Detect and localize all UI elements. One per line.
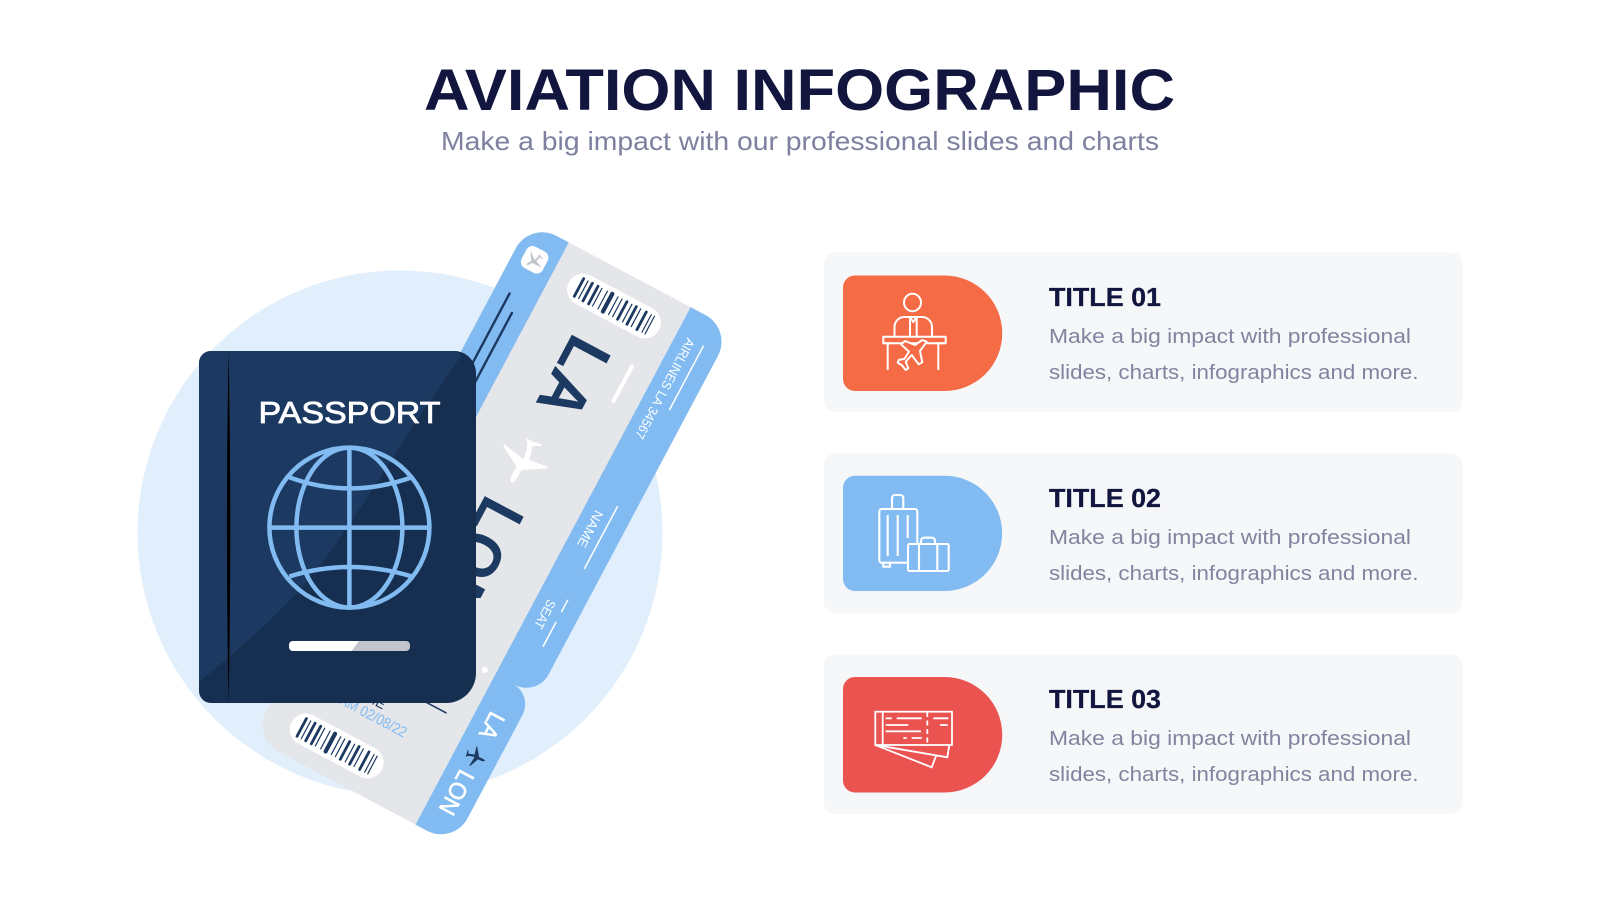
panel: title 02 [824,454,1462,613]
spine [227,351,230,703]
seat label: SEAT [531,597,559,631]
text block [1049,526,1418,585]
globe [269,448,429,608]
airlines label: AIRLINES LA 34567 [632,336,698,442]
heading: TITLE 02 [1049,483,1161,513]
text block: slides, charts, infographics and more. [1049,562,1418,585]
dark rule [403,690,446,713]
plane badge [518,244,551,276]
passport [199,351,476,703]
passport cover [199,351,476,703]
icon: luggage [879,495,949,571]
panel: title 03 [824,654,1462,814]
band lines [458,294,519,396]
heading: TITLE 03 [1049,684,1161,714]
perforation dot [481,666,489,674]
band rules [543,346,704,647]
top barcode [561,268,667,344]
white dash [614,367,632,401]
icon: tickets [875,712,952,767]
background circle [138,270,662,796]
date text: AM 02/08/22 [336,692,410,741]
name label: NAME [574,508,606,551]
illustration: passport and boarding pass [138,220,732,847]
icon: person at desk with plane [883,294,946,370]
ticket body [252,220,696,827]
passport bar [289,641,410,651]
boarding pass [252,220,732,847]
text block: slides, charts, infographics and more. [1049,763,1418,786]
cover highlight [199,351,461,682]
text block: Make a big impact with professional [1049,727,1411,750]
icon tile: orange [843,276,1002,391]
text block: Make a big impact with professional [1049,325,1411,348]
title: AVIATION INFOGRAPHIC [424,58,1175,123]
big LON text: LON [416,486,538,630]
stub LON text: LON [433,765,479,819]
right ticket band [416,307,732,847]
icon tile: blue [843,476,1002,591]
text block [1049,325,1418,384]
panel: title 01 [824,252,1462,412]
stub LA text: LA [473,707,510,744]
text block [1049,727,1418,786]
left ticket band [388,222,569,510]
text block: Make a big impact with professional [1049,526,1411,549]
subtitle: Make a big impact with our professional slides and charts [441,126,1159,156]
big LA text: LA [523,325,625,431]
big plane [503,438,548,483]
icon tile: red [843,677,1002,792]
name small text: NAME [345,679,389,712]
text block: slides, charts, infographics and more. [1049,361,1418,384]
passport label: PASSPORT [258,395,441,430]
stub plane [465,745,485,766]
heading: TITLE 01 [1049,282,1161,312]
bottom barcode [284,708,389,784]
